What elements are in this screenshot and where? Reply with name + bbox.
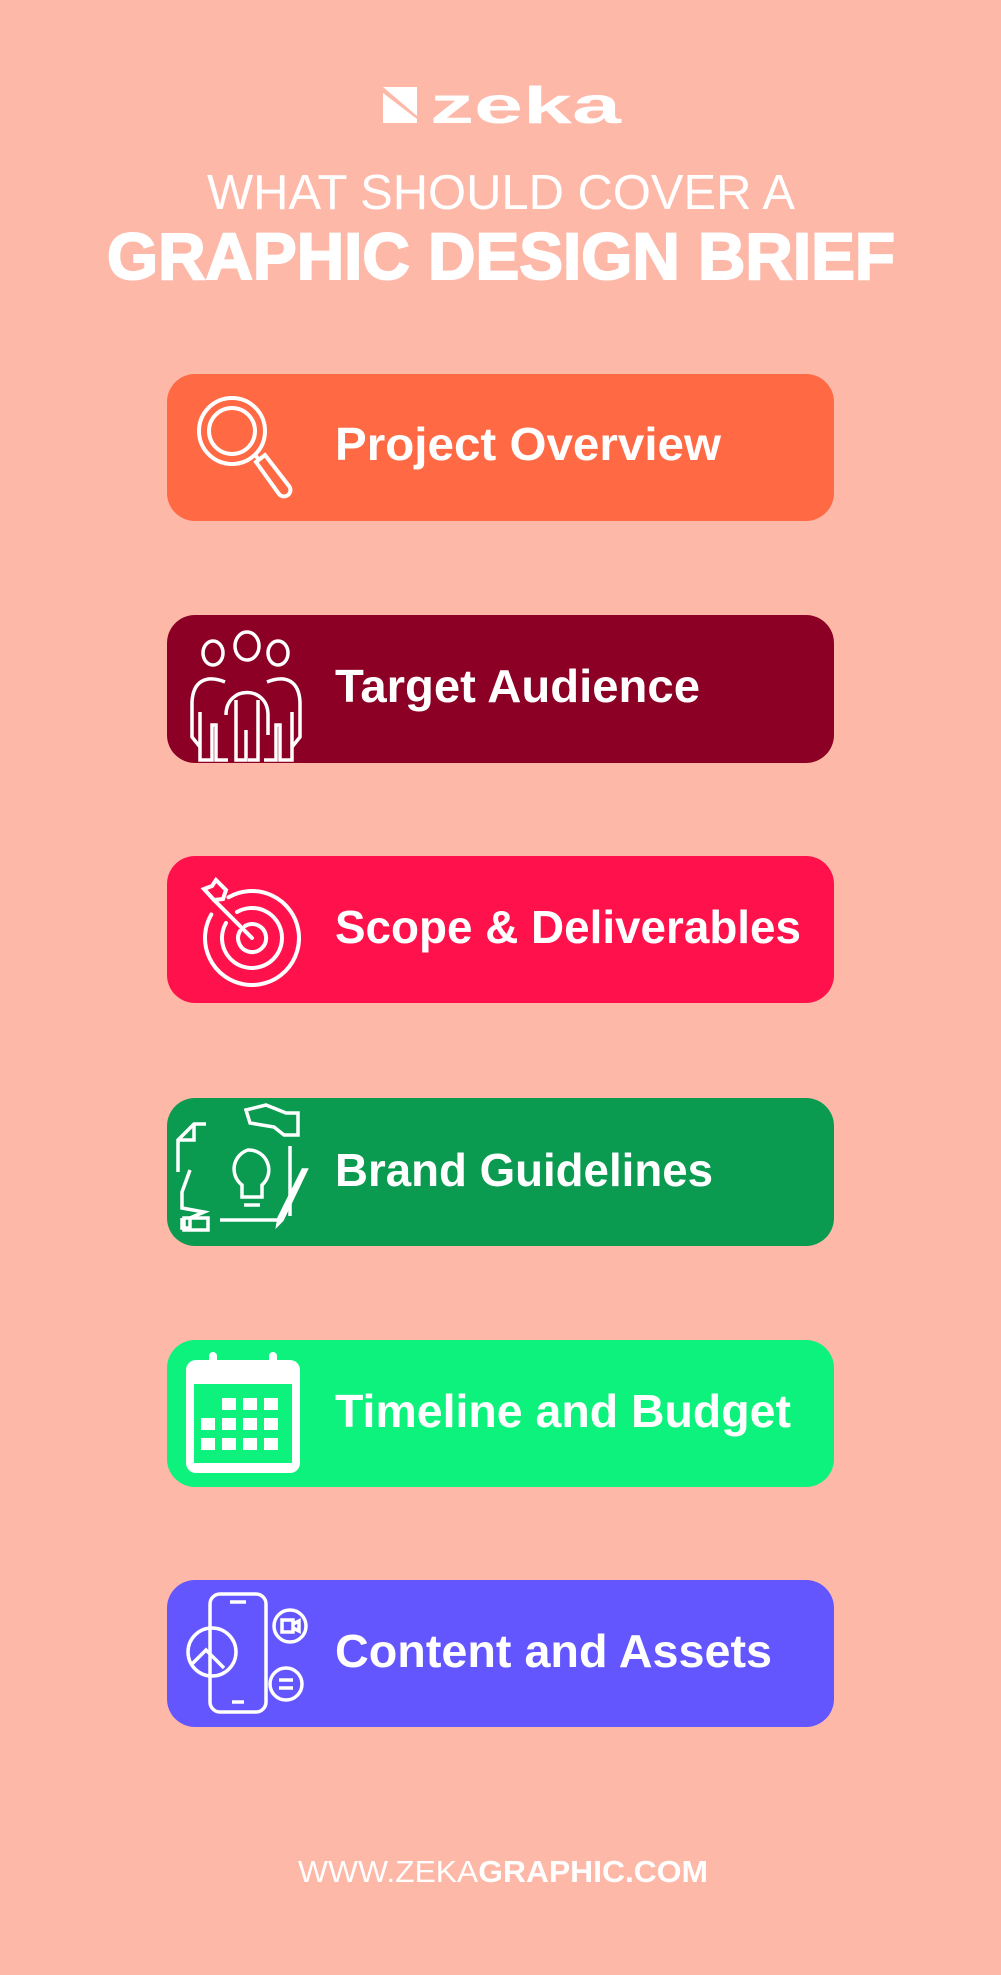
card: Scope & Deliverables <box>167 856 834 1003</box>
icon: calendar <box>186 1352 300 1473</box>
card: Content and Assets <box>167 1580 834 1727</box>
icon: phone with media <box>188 1594 306 1712</box>
card: Scope & Deliverables: Scope & Deliverables <box>335 901 801 953</box>
title line 1: WHAT SHOULD COVER A <box>207 166 795 220</box>
title line 2: GRAPHIC DESIGN BRIEF <box>107 219 895 293</box>
footer: website url: WWW.ZEKAGRAPHIC.COM <box>298 1854 708 1889</box>
card: Target Audience <box>167 615 834 763</box>
card: Timeline and Budget <box>167 1340 834 1487</box>
card: Brand Guidelines: Brand Guidelines <box>335 1144 713 1196</box>
icon: hands with lightbulb <box>178 1105 306 1230</box>
card: Project Overview: Project Overview <box>335 418 721 470</box>
icon: people <box>192 632 300 760</box>
logo: zeka <box>383 77 623 135</box>
icon: target <box>204 880 299 985</box>
card: Target Audience: Target Audience <box>335 660 700 712</box>
logo: zeka: zeka <box>430 77 623 135</box>
card: Project Overview <box>167 374 834 521</box>
card: Timeline and Budget: Timeline and Budget <box>335 1385 791 1437</box>
card: Brand Guidelines <box>167 1098 834 1246</box>
icon: magnifier <box>199 398 290 496</box>
card: Content and Assets: Content and Assets <box>335 1625 772 1677</box>
